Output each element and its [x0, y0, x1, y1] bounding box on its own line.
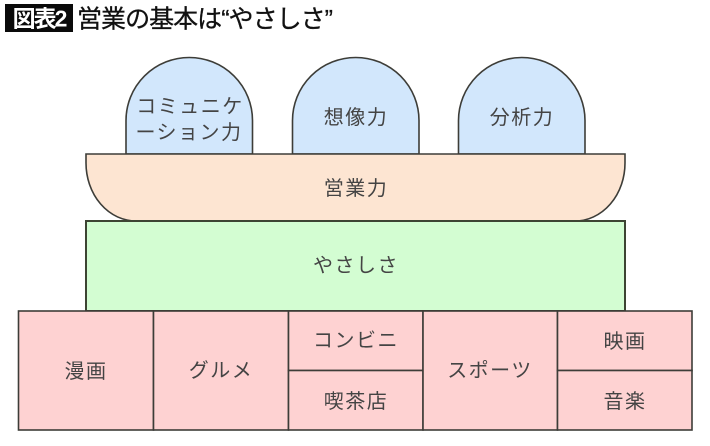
- cell: music: 音楽: [604, 390, 646, 413]
- cell: convenience store: [288, 311, 423, 370]
- dome: analysis: 分析力: [490, 106, 554, 129]
- dome: imagination: [292, 58, 419, 154]
- panel: kindness: やさしさ: [313, 255, 399, 277]
- cell: gourmet: [154, 311, 288, 430]
- cell: gourmet: グルメ: [189, 359, 253, 382]
- title: [5, 4, 333, 34]
- dome: imagination: 想像力: [324, 106, 388, 129]
- cell: manga: [18, 311, 154, 430]
- dome: communication: [126, 58, 252, 154]
- cell: coffee shop: 喫茶店: [324, 390, 388, 413]
- dome: analysis: [458, 58, 585, 154]
- panel: hobbies foundation: [18, 311, 692, 430]
- cell: coffee shop: [288, 370, 423, 430]
- panel: kindness: [86, 221, 625, 311]
- dome: communication: コミュニケ: [136, 96, 244, 118]
- title badge: 図表2: [13, 6, 67, 32]
- cell: movies: [558, 311, 692, 370]
- title text: 営業の基本は“やさしさ”: [77, 6, 333, 34]
- dome: communication: ーション力: [135, 121, 243, 144]
- cell: manga: 漫画: [64, 360, 108, 383]
- cell: movies: 映画: [604, 330, 646, 353]
- panel: sales ability bowl: 営業力: [324, 177, 388, 200]
- panel: sales ability bowl: [86, 154, 625, 221]
- cell: sports: [423, 311, 558, 430]
- cell: convenience store: コンビニ: [313, 329, 399, 352]
- panel: abilities domes: [126, 58, 585, 154]
- cell: sports: スポーツ: [447, 359, 533, 382]
- cell: music: [558, 370, 692, 430]
